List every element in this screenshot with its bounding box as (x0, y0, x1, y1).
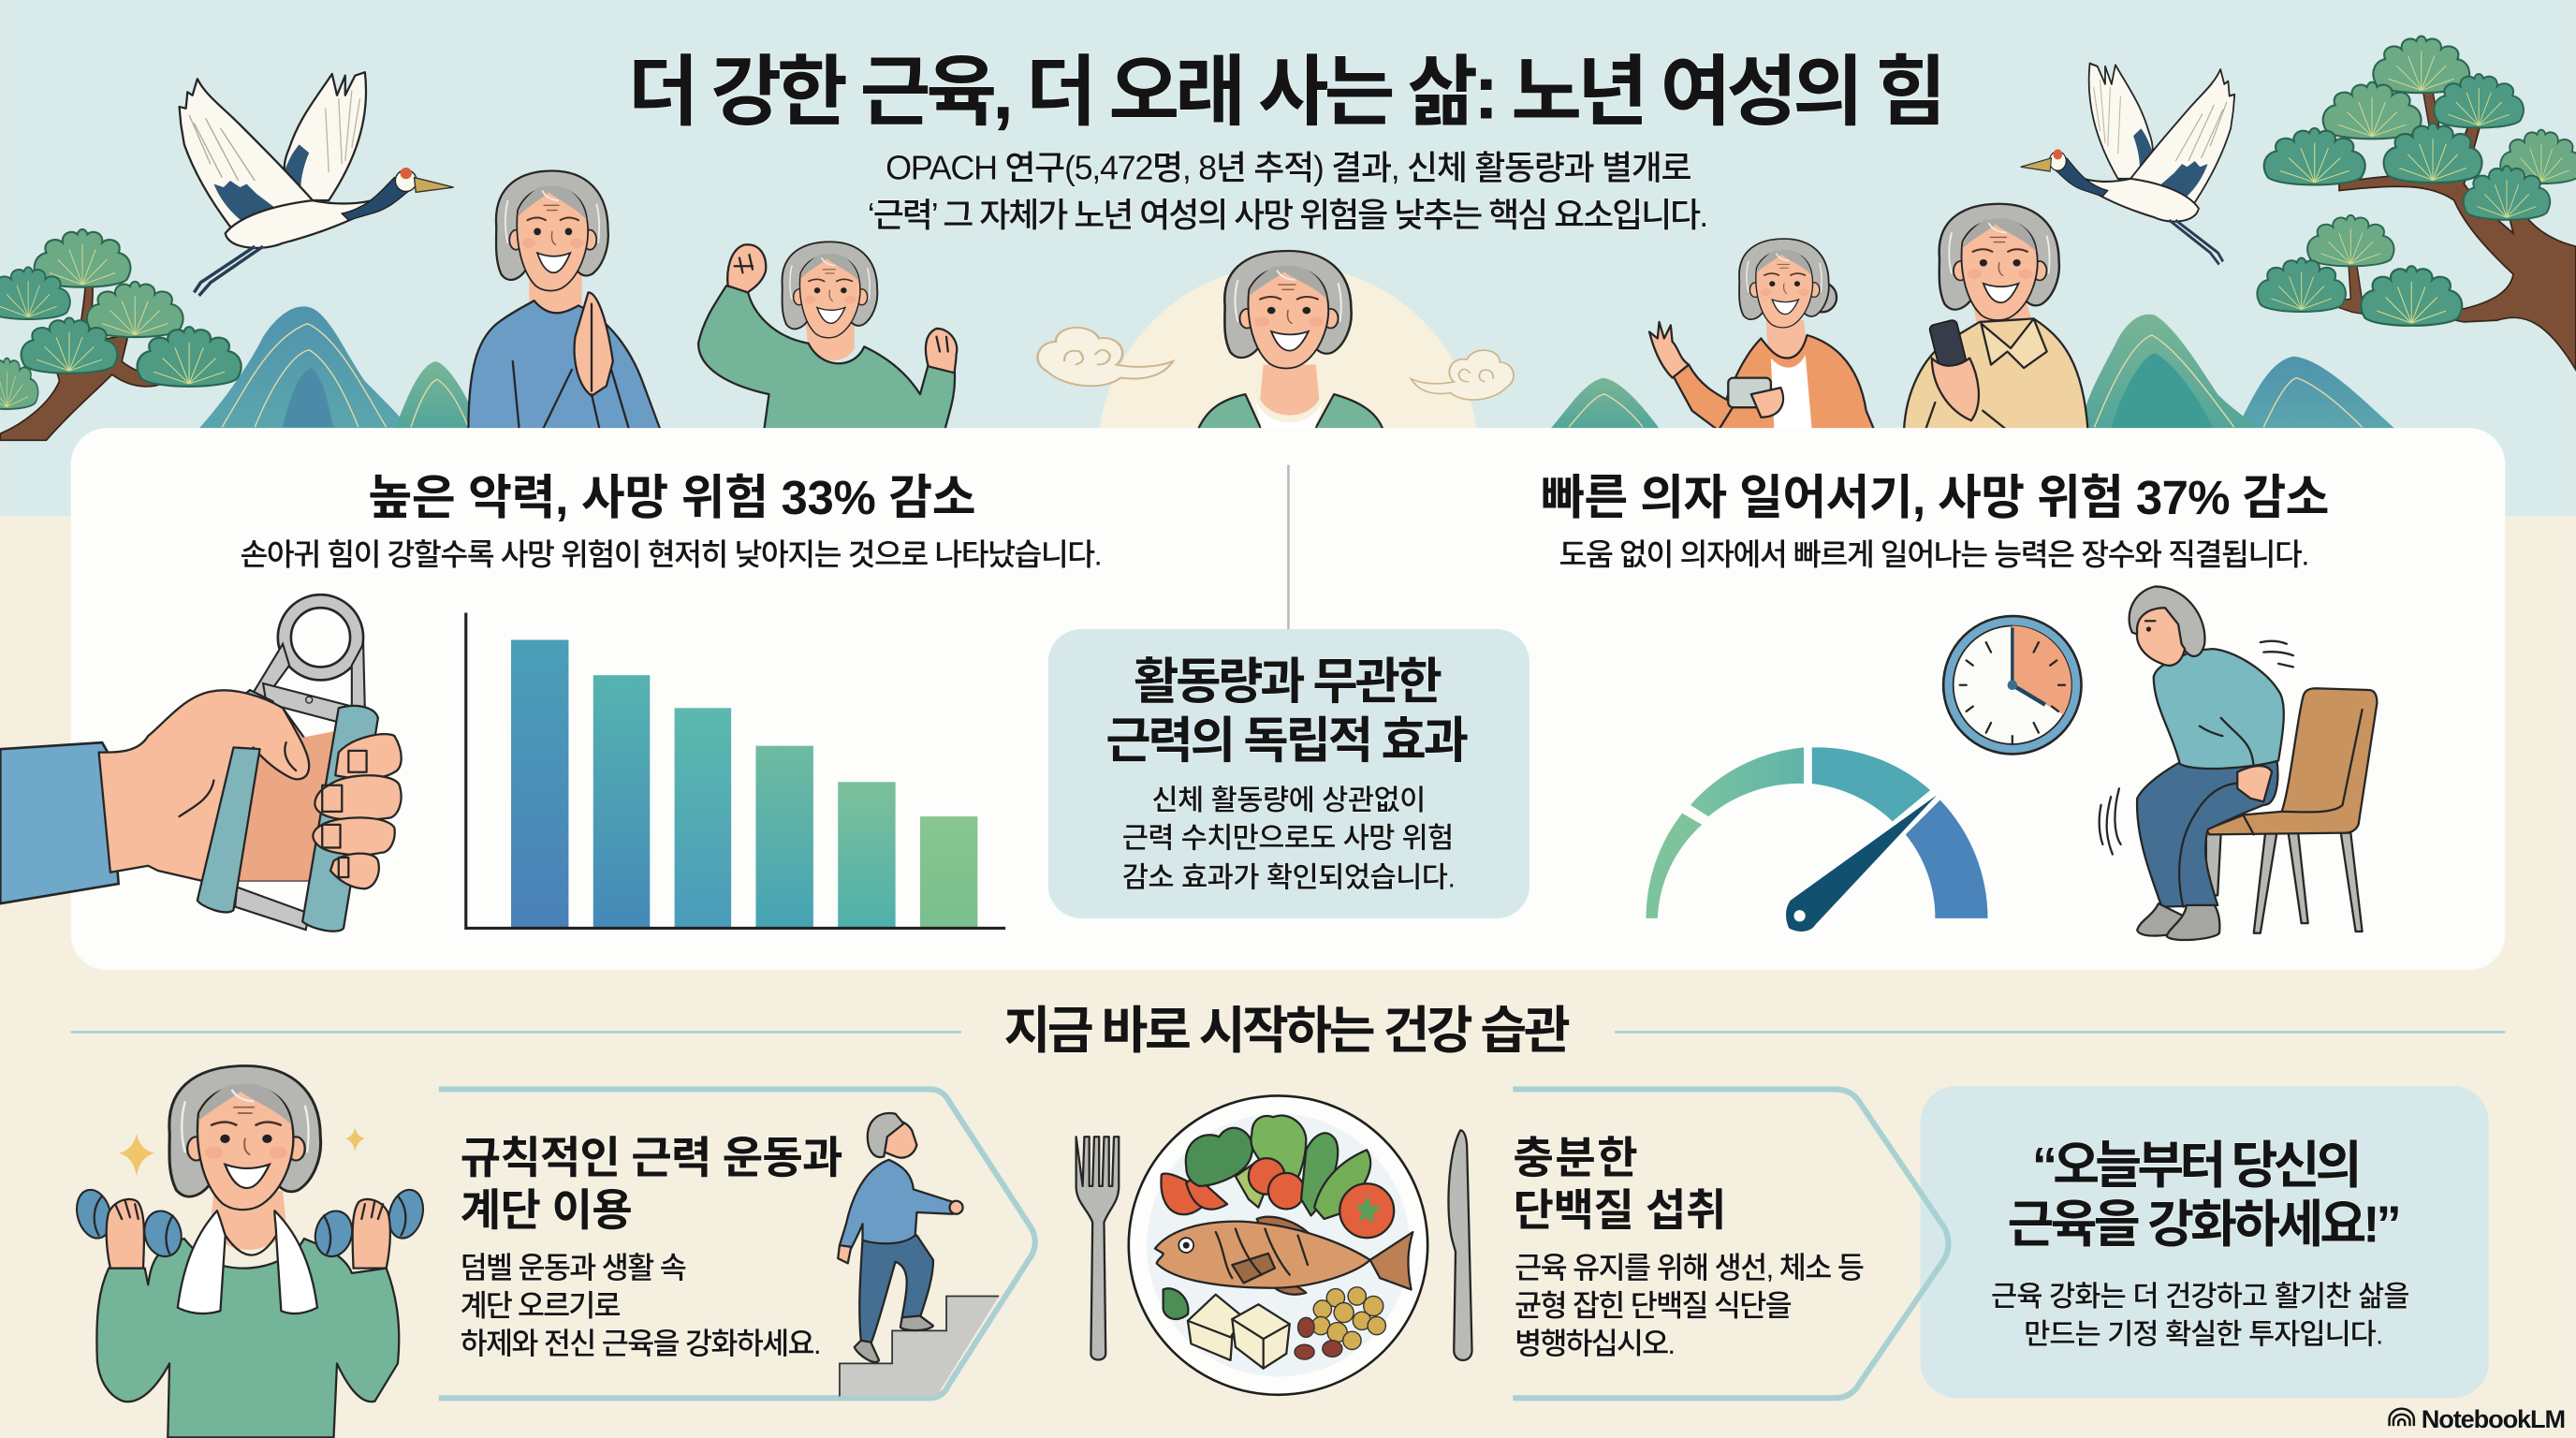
figure: woman rising from chair (2100, 586, 2377, 940)
mountains: right (1549, 315, 2396, 431)
figure: centre woman smiling (1197, 251, 1383, 431)
gauge chart (1647, 747, 1988, 932)
heading: strength exercise: 계단 이용 (461, 1186, 633, 1236)
heading: protein intake (1513, 1134, 1865, 1360)
mountains: left (198, 306, 481, 431)
icon: plate with fish, vegetables, tofu (1129, 1095, 1427, 1395)
callout: quote: “오늘부터 당신의 (2032, 1137, 2363, 1194)
arrow panel: protein (1513, 1089, 1948, 1398)
icon: crane right (2021, 64, 2234, 265)
figure: woman raising fists in green (698, 242, 957, 431)
heading: chair rise: 도움 없이 의자에서 빠르게 일어나는 능력은 장수와 직결됩니다. (1559, 538, 2309, 572)
right pine tree (2257, 37, 2576, 370)
heading: protein intake: 균형 잡힌 단백질 식단을 (1515, 1289, 1793, 1323)
panel: main evidence card (71, 428, 2505, 970)
section heading: start today: 지금 바로 시작하는 건강 습관 (1003, 1003, 1571, 1060)
heading: strength exercise: 덤벨 운동과 생활 속 (461, 1251, 687, 1284)
icon: knife (1448, 1130, 1472, 1360)
icon: fork (1076, 1137, 1119, 1359)
callout: independent effect: 근력의 독립적 효과 (1105, 713, 1469, 769)
icon: cloud right (1412, 350, 1514, 400)
heading: strength exercise: 계단 오르기로 (461, 1289, 622, 1323)
sun behind centre figure (1099, 265, 1477, 431)
callout: independent effect (1048, 629, 1530, 918)
heading: protein intake: 충분한 (1513, 1134, 1638, 1183)
heading: protein intake: 근육 유지를 위해 생선, 체소 등 (1515, 1251, 1865, 1284)
callout: independent effect: 활동량과 무관한 (1134, 654, 1442, 710)
subtitle: OPACH 연구(5,472명, 8년 추적) 결과, 신체 활동량과 별개로 (886, 148, 1692, 186)
heading: strength exercise: 하제와 전신 근육을 강화하세요. (461, 1327, 822, 1360)
figure: woman with cup in orange (1649, 239, 1874, 431)
logo: NotebookLM: NotebookLM (2422, 1404, 2566, 1433)
heading: chair rise (1541, 471, 2329, 572)
icon: cloud left (1037, 328, 1173, 386)
callout: independent effect: 신체 활동량에 상관없이 (1151, 784, 1426, 816)
heading: strength exercise (461, 1134, 842, 1360)
heading: grip strength (240, 471, 1103, 572)
left pine tree (0, 229, 242, 440)
callout: quote (1921, 1086, 2489, 1398)
heading: grip strength: 손아귀 힘이 강할수록 사망 위험이 현저히 낮아지는 것으로 나타났습니다. (240, 538, 1103, 572)
icon: hand squeezing gripper (0, 601, 402, 932)
heading: chair rise: 빠른 의자 일어서기, 사망 위험 37% 감소 (1541, 471, 2329, 524)
heading: protein intake: 단백질 섭취 (1513, 1186, 1727, 1236)
figure: woman lifting dumbbells (72, 1065, 428, 1437)
subtitle (868, 148, 1708, 234)
bar chart (466, 613, 1005, 928)
figure: woman praying in blue (468, 170, 661, 431)
divider line (1287, 465, 1290, 629)
callout: independent effect: 감소 효과가 확인되었습니다. (1122, 861, 1456, 894)
icon: woman climbing stairs (838, 1113, 999, 1397)
callout: independent effect: 근력 수치만으로도 사망 위험 (1122, 821, 1454, 854)
arrow panel: strength exercise (439, 1089, 1035, 1398)
heading: grip strength: 높은 악력, 사망 위험 33% 감소 (368, 471, 976, 524)
icon: clock (1943, 616, 2082, 754)
callout: quote: 근육을 강화하세요!” (2008, 1196, 2402, 1254)
subtitle: ‘근력’ 그 자체가 노년 여성의 사망 위험을 낮추는 핵심 요소입니다. (868, 196, 1708, 234)
figure: woman with phone in beige (1904, 204, 2088, 431)
callout: quote: 근육 강화는 더 건강하고 활기찬 삶을 (1991, 1280, 2409, 1313)
callout: quote: 만드는 기정 확실한 투자입니다. (2024, 1317, 2383, 1350)
title: 더 강한 근육, 더 오래 사는 삶: 노년 여성의 힘 (628, 49, 1947, 135)
icon: crane left (180, 72, 454, 296)
heading: protein intake: 병행하십시오. (1515, 1327, 1676, 1360)
heading: strength exercise: 규칙적인 근력 운동과 (461, 1134, 842, 1183)
